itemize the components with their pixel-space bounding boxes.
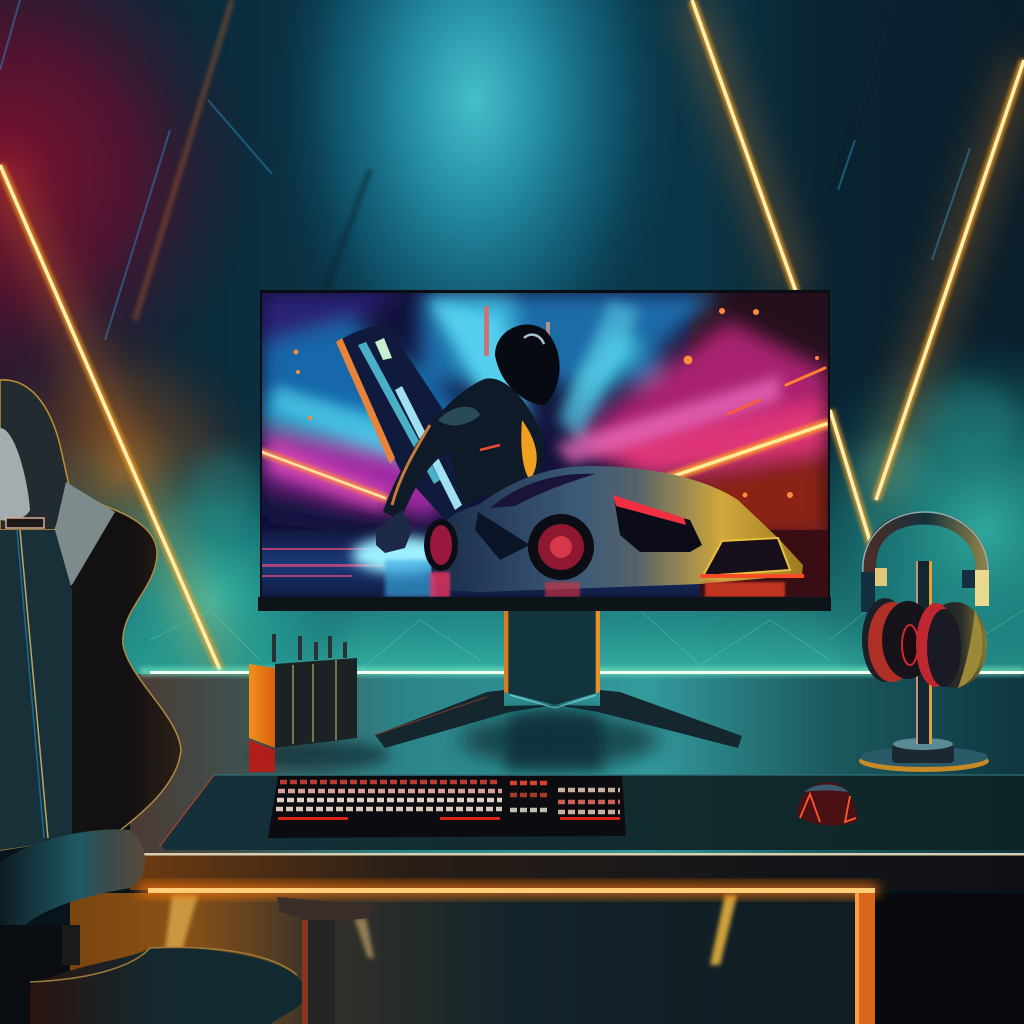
chair mesh panel — [55, 482, 115, 590]
stand base — [859, 750, 989, 772]
headband — [870, 518, 982, 575]
sparks — [294, 308, 819, 498]
stand pole — [916, 561, 932, 744]
gaming chair — [0, 380, 374, 1024]
wheels — [528, 514, 594, 580]
armored figure — [376, 306, 560, 553]
chair seat — [30, 947, 306, 1024]
monitor screen: game art — [262, 293, 828, 597]
chair backrest — [0, 490, 181, 850]
neon light beams — [0, 0, 1024, 670]
left ear cup — [862, 598, 908, 682]
side armrest — [277, 897, 374, 1024]
pen holder — [249, 634, 357, 772]
sports car — [424, 466, 804, 597]
monitor bottom bar — [258, 597, 831, 611]
keyboard — [268, 776, 626, 838]
light rays — [262, 293, 828, 540]
desk surface — [130, 667, 1024, 856]
mouse — [797, 782, 858, 826]
chair center panel — [0, 530, 72, 850]
background wall — [0, 0, 1024, 700]
headphone stand with headset — [859, 512, 989, 772]
monitor stand — [375, 611, 742, 770]
right ear cup — [923, 602, 987, 688]
monitor — [258, 290, 831, 611]
chair armrest pad — [0, 829, 145, 925]
neon streaks — [262, 368, 826, 498]
monitor frame — [260, 290, 830, 598]
desk front and glowing under-light — [70, 853, 1024, 1024]
chair headrest — [0, 428, 30, 521]
weapon blades — [336, 322, 470, 520]
key rows — [276, 782, 620, 812]
chair head section — [0, 380, 70, 530]
desk mat — [160, 775, 1024, 850]
